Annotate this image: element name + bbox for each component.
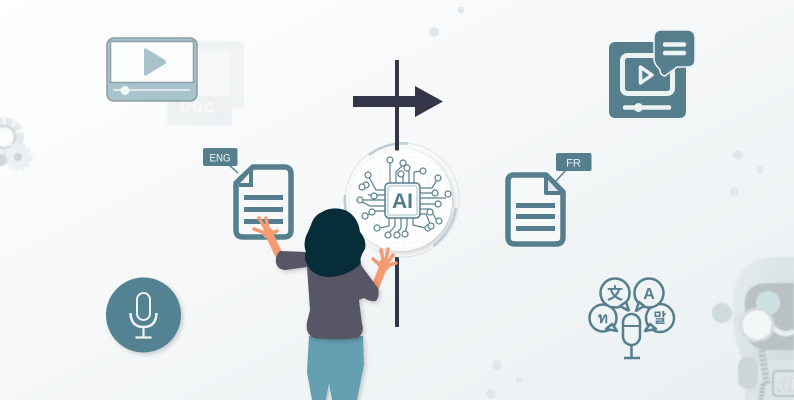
hair	[304, 208, 365, 277]
shirt	[276, 245, 379, 340]
arrow	[353, 86, 443, 117]
icon: translator bubbles with microphone	[590, 278, 674, 358]
AI chip circle: AI	[392, 190, 413, 213]
woman figure	[254, 208, 396, 400]
icon: translator bubbles with microphone: A	[643, 286, 655, 303]
icon: video player	[107, 38, 197, 101]
icon: video with speech bubble	[609, 30, 695, 118]
icon: ENG document	[203, 148, 291, 237]
icon: FR document	[508, 153, 592, 244]
icon: translator bubbles with microphone: 文	[607, 285, 623, 303]
icon: microphone circle	[106, 278, 181, 352]
AI chip circle	[345, 143, 459, 257]
vertical line	[395, 60, 399, 327]
ghost icon: DOC document	[167, 41, 244, 125]
icon: translator bubbles with microphone: ท	[598, 310, 608, 327]
ghost icon: DOC document: DOC	[180, 99, 216, 115]
right forearm and hand	[373, 249, 396, 290]
icon: translator bubbles with microphone: 말	[654, 310, 667, 326]
line segment in front of circle top	[395, 130, 399, 150]
robot, faded	[712, 257, 794, 400]
circuit traces	[357, 157, 451, 238]
gears, faded	[0, 122, 30, 169]
label: FR tag: FR	[566, 158, 581, 170]
left forearm and hand	[254, 218, 279, 255]
background dots	[429, 6, 764, 399]
jeans	[307, 336, 364, 400]
label: ENG tag: ENG	[210, 152, 230, 164]
